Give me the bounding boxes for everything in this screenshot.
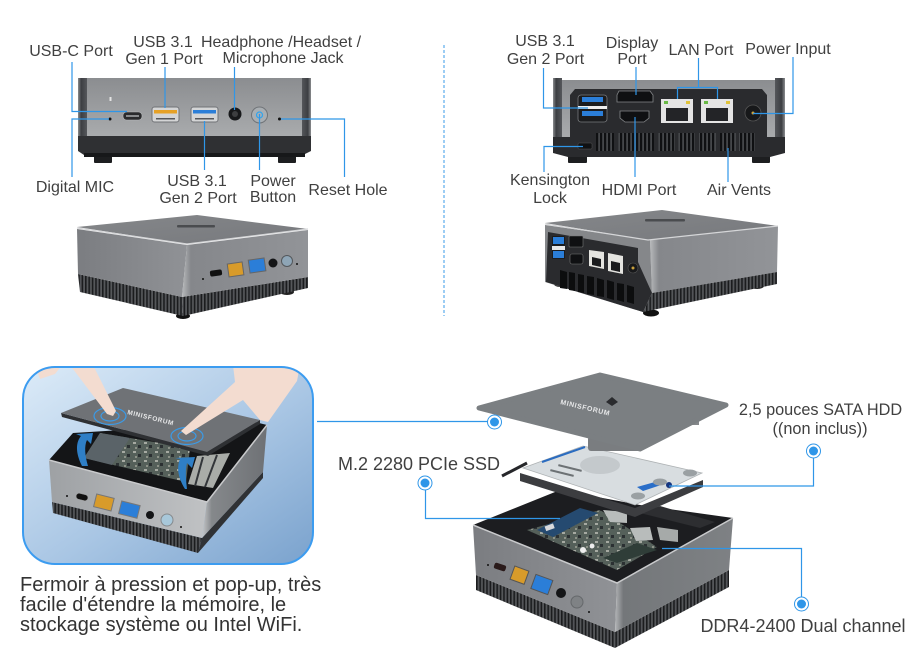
front view labels: Gen 1 Port: [125, 51, 203, 68]
touch ripples: [94, 408, 203, 444]
right blank side: [650, 226, 778, 293]
memory modules: [188, 453, 230, 488]
digital mic hole: [108, 118, 112, 120]
panel caption: facile d'étendre la mémoire, le: [20, 594, 286, 616]
LAN port 2: [701, 99, 733, 123]
rear view callout lines: [544, 57, 793, 182]
front view labels: Gen 2 Port: [159, 190, 237, 207]
rear view labels: USB 3.1: [515, 33, 575, 50]
lid: [61, 388, 260, 456]
front view labels: Power: [250, 173, 296, 190]
rear view labels: Power Input: [745, 41, 831, 58]
lid with logo: [479, 375, 726, 451]
iso rear ports: [552, 236, 638, 274]
front view labels: Button: [250, 189, 296, 206]
memory shields: [603, 510, 627, 523]
panel caption: stockage système ou Intel WiFi.: [20, 614, 302, 636]
front view labels: USB-C Port: [29, 43, 113, 60]
front view labels: Reset Hole: [308, 182, 388, 199]
panel: pop-up lid close-up: [23, 365, 313, 564]
rear view labels: Gen 2 Port: [507, 51, 585, 68]
HDMI port: [620, 111, 649, 122]
front view labels: Microphone Jack: [223, 50, 344, 67]
hard drive: [502, 446, 703, 517]
power button: [252, 107, 268, 123]
audio jack: [228, 108, 242, 120]
LAN port 1: [661, 99, 693, 123]
rear USB ports: [578, 95, 607, 122]
isometric rear photo of mini PC: [545, 210, 778, 316]
rear view labels: Air Vents: [707, 182, 771, 199]
front view labels: Digital MIC: [36, 179, 114, 196]
isometric front photo of mini PC: [77, 215, 308, 319]
motherboard: [527, 510, 657, 570]
rear view labels: Kensington: [510, 172, 590, 189]
front ports: [76, 493, 88, 501]
front elevation of mini PC: [78, 78, 311, 163]
chassis: [473, 490, 733, 648]
exploded view labels: [338, 401, 906, 636]
front view labels: [29, 34, 388, 207]
exploded view labels: ((non inclus)): [772, 420, 868, 438]
rear air vents: [596, 133, 755, 151]
front view labels: USB 3.1: [133, 34, 193, 51]
motherboard: [84, 433, 190, 482]
iso rear vents: [560, 270, 634, 304]
rear view labels: HDMI Port: [602, 182, 677, 199]
front view labels: USB 3.1: [167, 173, 227, 190]
blue lift arrows: [76, 433, 195, 489]
front view callout lines: [72, 62, 344, 177]
rear face: [545, 225, 652, 312]
USB gen 2 port: [191, 107, 218, 122]
panel caption: [20, 574, 321, 636]
rear view labels: Lock: [533, 190, 568, 207]
front view labels: Headphone /Headset /: [201, 34, 362, 51]
lid with logo: MINISFORUM: [560, 399, 611, 418]
rear view labels: [507, 33, 831, 207]
USB gen 1 port: [152, 107, 179, 122]
divider between front and back views: [443, 45, 445, 316]
exploded view labels: DDR4-2400 Dual channel: [700, 616, 906, 636]
Kensington lock slot: [578, 143, 592, 149]
rear elevation of mini PC: [553, 78, 785, 163]
rear view labels: Port: [617, 51, 647, 68]
panel caption: Fermoir à pression et pop-up, très: [20, 574, 321, 596]
photo of opened mini PC: [49, 422, 267, 553]
exploded view labels: 2,5 pouces SATA HDD: [739, 401, 902, 419]
reset hole: [278, 118, 281, 120]
exploded view of mini PC: [473, 375, 733, 648]
lid: MINISFORUM: [127, 409, 175, 427]
fingers and hands: [35, 365, 300, 435]
callout markers: [418, 415, 820, 611]
M.2 SSD: [537, 508, 598, 537]
rear view labels: LAN Port: [669, 42, 734, 59]
front ports: [493, 562, 507, 572]
power input: [745, 105, 761, 121]
DisplayPort: [617, 91, 653, 102]
rear view labels: Display: [606, 35, 658, 52]
exploded view labels: M.2 2280 PCIe SSD: [338, 454, 500, 474]
exploded view callout lines: [317, 422, 814, 597]
USB-C port: [123, 112, 142, 120]
